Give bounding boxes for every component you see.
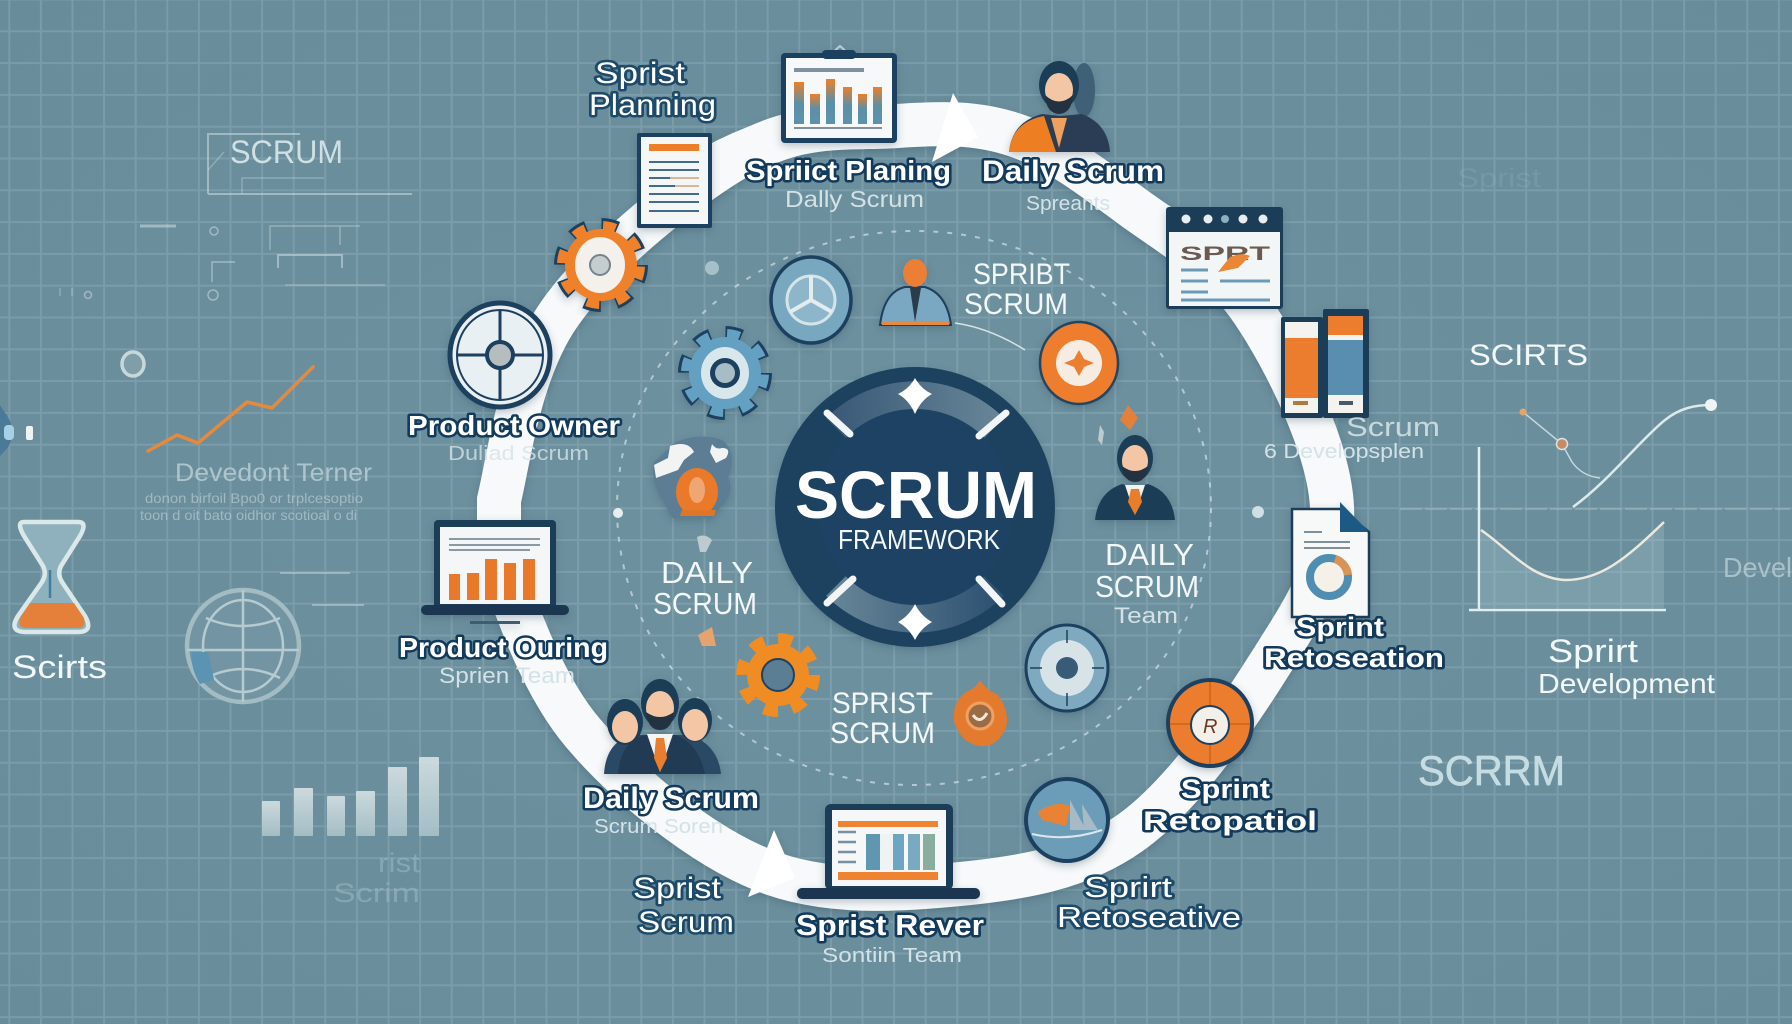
label: Spriict Planing: Spriict Planing	[746, 155, 951, 186]
label: Scirts: Scirts	[12, 649, 107, 685]
inner label: SPRIBT SCRUM: SPRIBT	[973, 258, 1070, 291]
left edge fragment	[0, 405, 33, 456]
icon: browser calendar: SPRT	[1180, 244, 1271, 265]
icon: orange gear	[565, 229, 637, 301]
ring marker	[122, 352, 144, 376]
icon: orange retrospective dial: R	[1203, 716, 1217, 738]
icon: clipboard chart	[781, 46, 897, 143]
subtitle: FRAMEWORK: FRAMEWORK	[838, 524, 1000, 555]
inner label: DAILY SCRUM Team: SCRUM	[1095, 569, 1199, 604]
step: Sprist Planning heading: Planning	[589, 89, 716, 122]
label: Sprirt Development: Development	[1538, 668, 1715, 699]
icon: browser calendar	[1166, 207, 1283, 309]
icon: blue chart badge	[1026, 779, 1108, 861]
star: bottom	[898, 604, 932, 640]
central disc: Scrum Framework	[775, 367, 1055, 647]
step: Sprist Planning heading	[589, 57, 716, 122]
inner icon: person right	[1095, 435, 1175, 520]
faint label: Sprist: Sprist	[1457, 163, 1542, 193]
faded label: development team: Devedont Terner	[175, 459, 372, 487]
label: Sprist Scrum bottom: Sprist	[633, 872, 722, 905]
bar chart: faded bars	[262, 757, 439, 836]
label: Sprint Retoseation: Sprint	[1296, 612, 1384, 642]
label: SCIRTS: SCIRTS	[1469, 339, 1588, 372]
dashed inner orbit	[617, 231, 1211, 785]
label: Sprirt Development	[1538, 633, 1715, 699]
sublabel: Scrum Soren	[594, 816, 723, 838]
icon: orange retrospective dial	[1168, 680, 1252, 766]
label: Sprist Rever	[796, 910, 984, 967]
label: Sprirt Retoseative: Sprirt	[1084, 872, 1172, 904]
icon: daily scrum person	[1009, 61, 1110, 152]
faint divider	[1400, 508, 1790, 510]
faded decorative lines	[280, 573, 364, 605]
label: Sprirt Retoseative: Retoseative	[1057, 902, 1241, 934]
inner label: DAILY SCRUM Team: Team	[1114, 603, 1178, 628]
label: Product Owner: Product Owner	[408, 410, 620, 441]
label: Daily Scrum top	[982, 155, 1164, 215]
inner icon: person orange head	[880, 259, 951, 325]
icon: product laptop	[421, 520, 569, 624]
sublabel: Sprien Team	[439, 663, 575, 688]
inner decorative line	[955, 323, 1025, 350]
inner label: SPRIBT SCRUM	[964, 258, 1070, 321]
arrow head: top	[932, 93, 978, 162]
inner label: SPRIST SCRUM: SPRIST	[832, 687, 933, 720]
label: SCRRM: SCRRM	[1418, 747, 1565, 794]
label: Sprist Rever: Sprist Rever	[796, 910, 984, 942]
label: Daily Scrum bottom	[583, 782, 759, 838]
faded small description	[140, 490, 363, 523]
faded small description: toon d oit bato oidhor scotioal o di	[140, 507, 357, 523]
label: Product Ouring	[399, 632, 608, 688]
inner label: DAILY SCRUM left: DAILY	[661, 555, 753, 590]
line chart: sprint development	[1469, 399, 1717, 610]
icon: hourglass	[14, 522, 88, 632]
icon: book pair	[1281, 309, 1369, 418]
inner icon: orange badge small	[954, 680, 1007, 746]
inner label: DAILY SCRUM Team: DAILY	[1105, 537, 1194, 572]
inner label: DAILY SCRUM Team	[1095, 537, 1199, 628]
label: Daily Scrum bottom: Daily Scrum	[583, 782, 759, 815]
sublabel: 6 Developsplen	[1264, 441, 1424, 463]
faded label: sprint scrum	[333, 848, 421, 908]
sublabel: Duliad Scrum	[448, 443, 589, 465]
icon: review laptop	[797, 804, 980, 899]
faded label: SCRUM: SCRUM	[230, 134, 343, 170]
faded scrum board sketch	[60, 134, 412, 300]
step: Sprist Planning heading: Sprist	[595, 57, 686, 90]
inner label: SPRIST SCRUM: SCRUM	[830, 717, 935, 750]
inner label: DAILY SCRUM left: SCRUM	[653, 586, 757, 621]
label: Sprint Retopation	[1143, 774, 1317, 836]
title: SCRUM: SCRUM	[795, 458, 1037, 533]
label: Scrum right	[1264, 412, 1440, 463]
faded small description: donon birfoil Bpo0 or trplcesoptio	[145, 490, 363, 506]
inner icon: settings dial	[1026, 625, 1108, 711]
faded label: sprint scrum: Scrim	[333, 878, 420, 908]
panel: right background decorations	[1400, 163, 1792, 794]
line chart: orange trend	[148, 367, 313, 451]
ribbon widening near the document	[650, 113, 800, 240]
label: Product Owner	[408, 410, 620, 465]
icon: team of three	[604, 679, 721, 774]
inner label: SPRIST SCRUM	[830, 687, 935, 750]
label: Sprist Scrum bottom: Scrum	[638, 906, 734, 939]
label: Sprirt Development: Sprirt	[1548, 633, 1638, 669]
label: Product Ouring: Product Ouring	[399, 632, 608, 663]
label: Sprist Scrum bottom	[633, 872, 734, 939]
inner icon: large orange gear	[745, 642, 811, 708]
sublabel: Dally Scrum	[785, 186, 924, 212]
inner icon: blue gear	[689, 337, 761, 409]
dial ticks	[827, 413, 1006, 604]
inner icon: orange badge	[1040, 322, 1118, 404]
label: Scrum right: Scrum	[1346, 412, 1440, 442]
label: Sprint Retopation: Sprint	[1181, 774, 1270, 804]
label: Sprint Retopation: Retopatiol	[1143, 806, 1317, 836]
arrow head: bottom	[748, 830, 795, 897]
label: Sprint Retoseation	[1264, 612, 1444, 673]
star: top	[898, 378, 932, 414]
label: Spriict Planing	[746, 155, 951, 212]
inner label: DAILY SCRUM left	[653, 555, 757, 621]
white process ring with arrows	[499, 93, 1332, 897]
inner label: SPRIBT SCRUM: SCRUM	[964, 288, 1068, 321]
icon: target dial	[450, 303, 550, 407]
icon: folded report	[1292, 502, 1369, 617]
icon: globe	[187, 590, 299, 702]
panel: left background decorations	[0, 134, 439, 908]
inner icon: clock badge	[771, 257, 851, 343]
faded label: sprint scrum: rist	[378, 848, 421, 878]
icon: document	[637, 133, 712, 228]
label: Daily Scrum top: Daily Scrum	[982, 155, 1164, 188]
sublabel: Sontiin Team	[822, 945, 962, 967]
inner icon: orange teapot	[653, 436, 732, 518]
inner icon: small markers	[613, 261, 1264, 646]
label: Sprirt Retoseative	[1057, 872, 1241, 934]
sublabel: Spreants	[1026, 193, 1110, 215]
label: Sprint Retoseation: Retoseation	[1264, 643, 1444, 673]
